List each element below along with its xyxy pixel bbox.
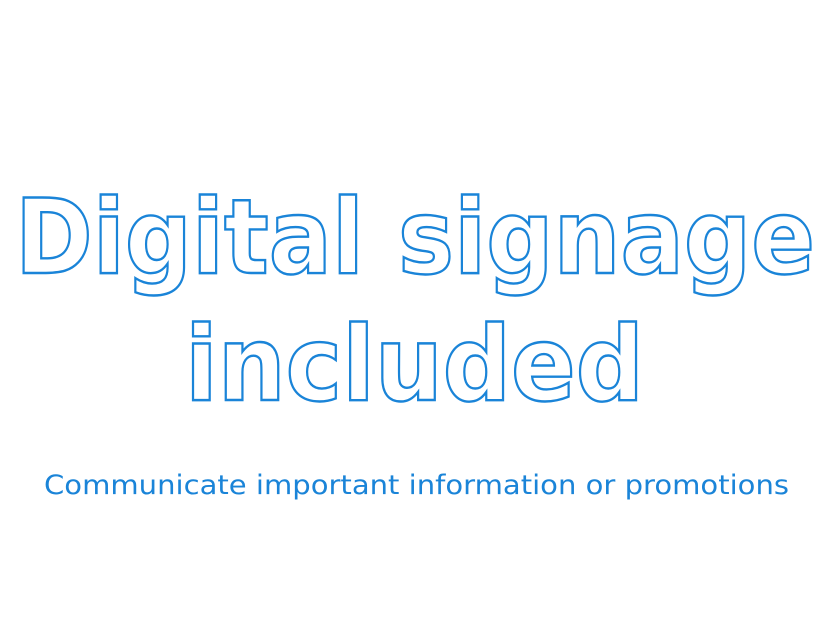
title: outlined heading: included (185, 305, 644, 425)
title: outlined heading: Digital (15, 178, 364, 298)
subtitle: Communicate important information or promotions (44, 470, 789, 501)
title: outlined heading (15, 178, 815, 425)
